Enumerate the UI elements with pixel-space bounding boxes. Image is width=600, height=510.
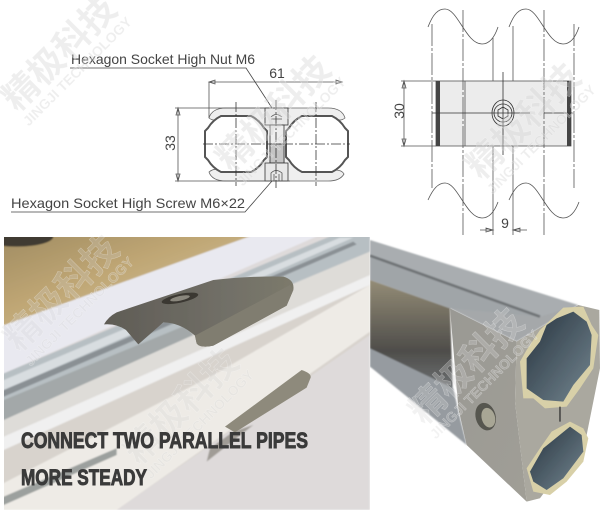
dimension 61 lines <box>209 80 342 118</box>
watermark photo right: JINGJI TECHNOLOGY <box>427 326 542 442</box>
panel: front view technical drawing <box>401 9 579 235</box>
watermark top right: 精极科技 <box>458 56 589 187</box>
centre lines and bolt <box>432 72 574 155</box>
plate dark ends <box>436 81 571 146</box>
hexagon screw <box>265 163 288 181</box>
watermark photo left: JINGJI TECHNOLOGY <box>22 253 137 369</box>
leader: screw <box>11 181 272 212</box>
pipe centre and edge lines <box>432 10 574 235</box>
label: nut: Hexagon Socket High Nut M6 <box>71 51 255 67</box>
connector plate <box>436 81 571 146</box>
panel: photo of connector end view <box>370 240 600 502</box>
lower clamp edge <box>225 370 311 432</box>
watermark top left: JINGJI TECHNOLOGY <box>20 13 135 129</box>
watermark top right: JINGJI TECHNOLOGY <box>484 81 599 197</box>
watermark photo centre: 精极科技 <box>116 341 247 472</box>
photo caption line 1: CONNECT TWO PARALLEL PIPES <box>21 428 308 453</box>
right pipe section <box>286 116 348 172</box>
end face <box>515 305 600 502</box>
panel: cross-section technical drawing <box>11 68 350 212</box>
seam between openings <box>559 406 561 422</box>
dimension 30: 30 <box>391 103 407 119</box>
connector body outline <box>207 108 345 181</box>
hexagon nut <box>265 108 288 125</box>
clamp side plate <box>450 308 527 502</box>
central web <box>270 125 284 163</box>
wide clamp plate <box>104 276 294 347</box>
panel: photo of connector on rails <box>0 227 370 510</box>
lower pipe opening <box>527 422 588 495</box>
dimension 33 lines <box>175 108 290 181</box>
left pipe section <box>205 116 267 172</box>
photo scene <box>0 227 370 510</box>
upper pipe opening <box>520 307 598 408</box>
dimension 61: 61 <box>269 65 285 81</box>
dimension 9 lines <box>480 228 527 232</box>
watermark top centre: 精极科技 <box>208 48 339 179</box>
watermark photo centre: JINGJI TECHNOLOGY <box>142 366 257 482</box>
watermark top centre: JINGJI TECHNOLOGY <box>234 73 349 189</box>
centre lines <box>203 100 350 188</box>
dimension 33: 33 <box>162 135 178 151</box>
extrusion bodies <box>370 240 578 445</box>
bolt hole <box>475 402 496 430</box>
dimension 9: 9 <box>501 215 509 231</box>
top pipe break waves <box>428 9 579 44</box>
photo caption line 2: MORE STEADY <box>21 465 147 490</box>
dimension 30 lines <box>401 81 436 146</box>
watermark photo right: 精极科技 <box>401 301 532 432</box>
leader: nut <box>70 68 272 108</box>
label: screw: Hexagon Socket High Screw M6×22 <box>11 195 245 211</box>
bottom pipe break waves <box>428 183 579 218</box>
